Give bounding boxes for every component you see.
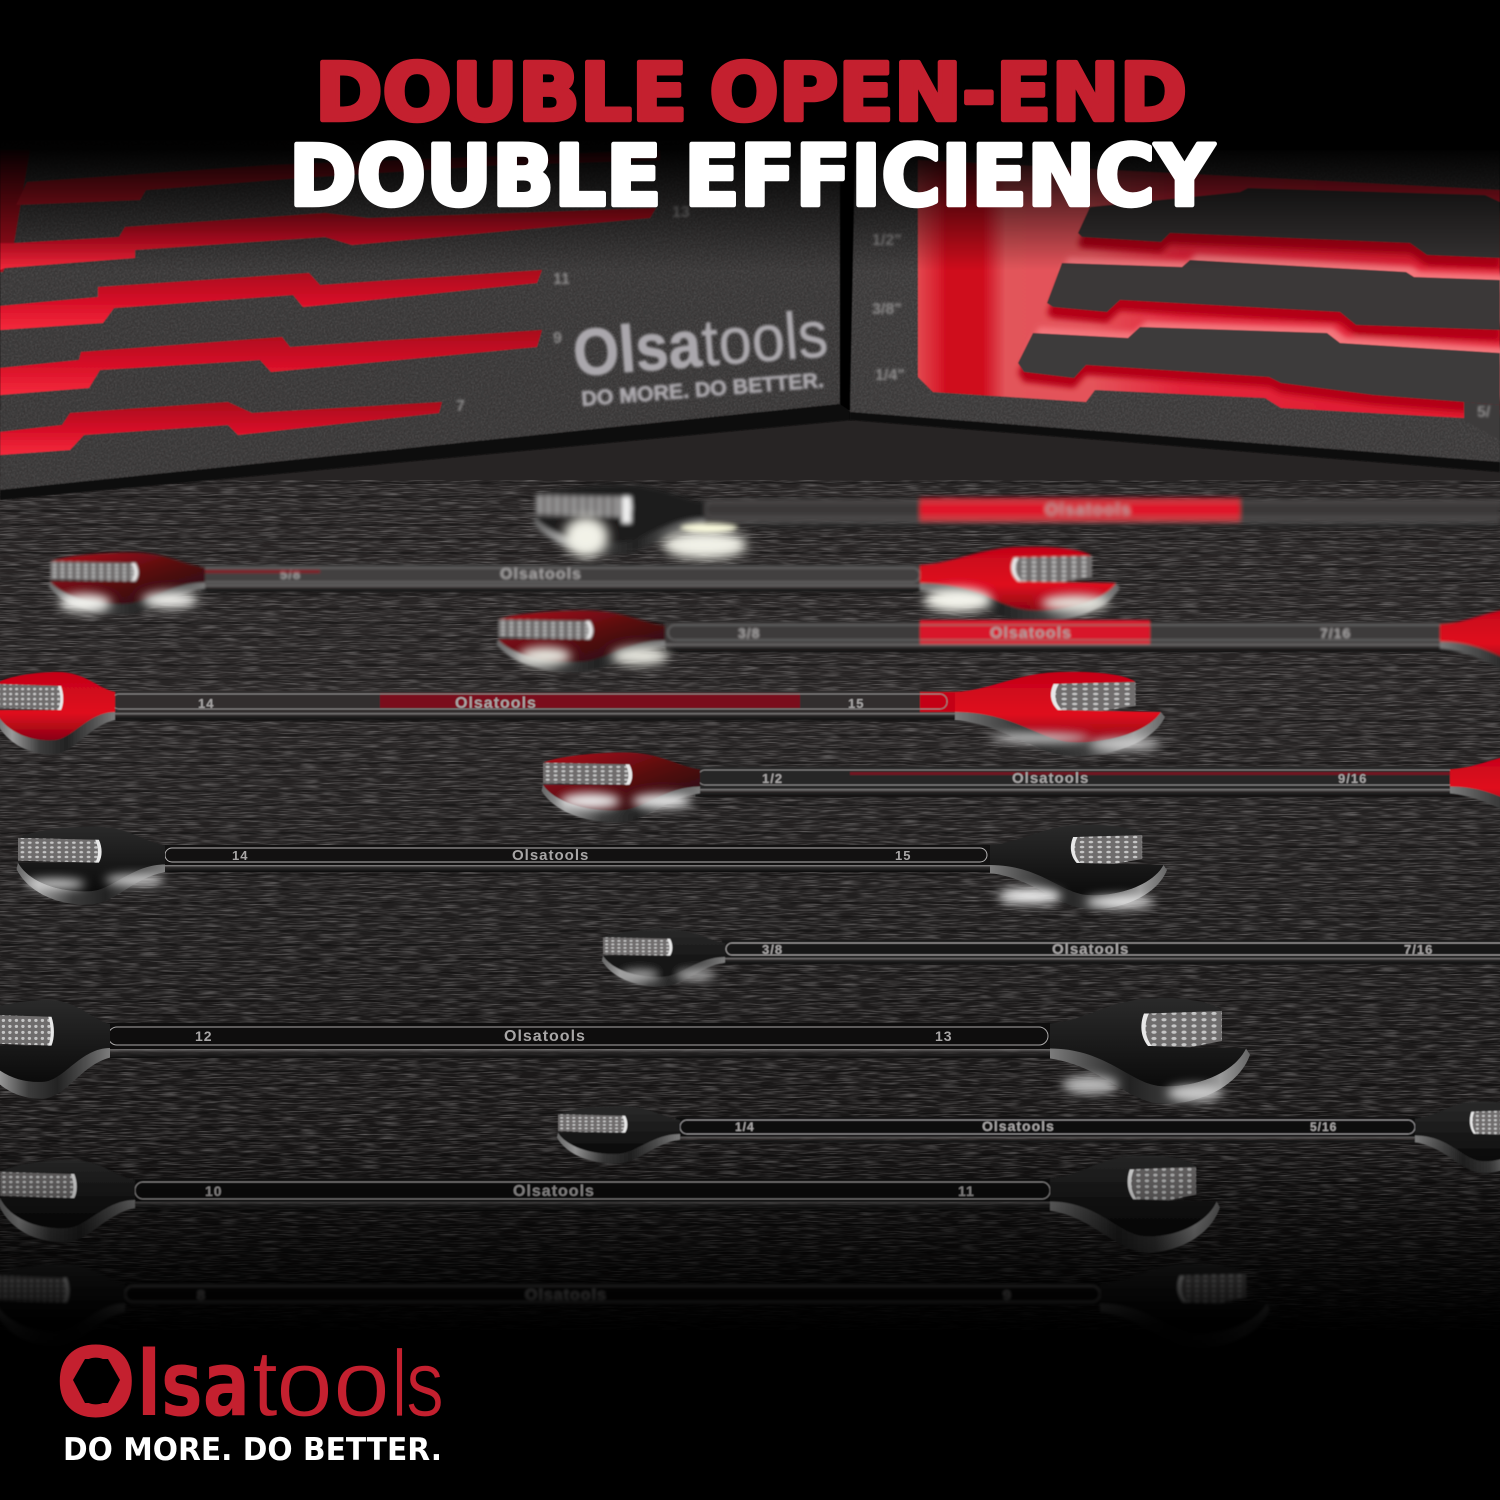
brand logo (55, 1327, 444, 1468)
wrench: fourth row: Olsatools (455, 695, 537, 712)
wrench: tenth row: 10 (205, 1183, 223, 1199)
wrench: seventh row: Olsatools (1052, 941, 1129, 958)
logo tagline: DO MORE. DO BETTER. (63, 1432, 442, 1468)
tray size labels: 1/4" (875, 367, 905, 384)
wrench: tenth row (0, 1155, 1220, 1252)
wrench: eleventh row: 8 (197, 1287, 206, 1303)
wrench: fifth row: 9/16 (1338, 771, 1367, 786)
logo wordmark: O (55, 1327, 137, 1439)
wrench: sixth row: 15 (895, 848, 911, 863)
wrench: seventh row: 3/8 (762, 942, 783, 957)
title (289, 47, 1215, 225)
tray size labels (456, 204, 1491, 421)
wrench: fifth row: Olsatools (1012, 770, 1089, 787)
tray logo: Olsatools: Olsa (570, 306, 705, 390)
tray size labels: 11 (553, 271, 570, 288)
tray logo: Olsatools: DO MORE. DO BETTER. (581, 369, 825, 411)
wrench: third row: Olsatools (990, 625, 1072, 642)
foam mat (0, 410, 1500, 1360)
logo wordmark: o (333, 1331, 390, 1437)
wrench: second row: Olsatools (500, 566, 582, 583)
wrench: tenth row: 11 (958, 1183, 975, 1199)
tray size labels: 1/2" (872, 232, 902, 249)
wrench: tenth row: Olsatools (513, 1183, 595, 1200)
wrench: fourth row (0, 672, 1165, 756)
wrench: eleventh row (0, 1264, 1270, 1348)
wrench: sixth row: Olsatools (512, 847, 589, 864)
wrench: sixth row: 14 (232, 848, 248, 863)
logo wordmark: lsa (137, 1332, 250, 1437)
wrench: fifth row (541, 752, 1500, 824)
wrench: eighth row: Olsatools (504, 1028, 586, 1045)
logo wordmark: s (406, 1331, 444, 1437)
wrench: eighth row: 12 (195, 1028, 213, 1044)
tray size labels: 5/ (1477, 404, 1491, 421)
wrench: second row: 5/8 (280, 567, 301, 582)
top shadow (0, 0, 1500, 270)
wrench: ninth row: Olsatools (982, 1118, 1055, 1134)
wrench: sixth row (17, 825, 1167, 909)
tray size labels: 9 (553, 330, 562, 347)
bottom black band (0, 1370, 1500, 1500)
tray size labels: 7 (456, 398, 465, 415)
wrench: top row back: Olsatools (1045, 500, 1131, 519)
title line 1: DOUBLE OPEN-END (315, 47, 1187, 139)
logo hexagon counter (73, 1359, 120, 1403)
wrench: eleventh row: Olsatools (525, 1287, 607, 1304)
wrench: eleventh row: 9 (1003, 1287, 1012, 1303)
tray logo: Olsatools (570, 296, 830, 411)
wrench: third row: 3/8 (738, 625, 760, 641)
wrench: ninth row: 1/4 (735, 1120, 755, 1134)
panel: right foam tray (imperial) (850, 150, 1500, 472)
logo wordmark: o (276, 1331, 333, 1437)
wrench: second row (48, 547, 1120, 623)
wrench: third row: 7/16 (1320, 625, 1351, 641)
tray size labels: 13 (672, 204, 690, 221)
wrench: seventh row: 7/16 (1404, 942, 1433, 957)
wrench: fourth row: 15 (848, 696, 864, 711)
logo wordmark: l (392, 1331, 407, 1437)
wrench: eighth row: 13 (935, 1028, 953, 1044)
wrench: seventh row (602, 929, 1500, 987)
wrench: third row (496, 607, 1500, 679)
wrench: eighth row (0, 998, 1250, 1104)
wrench: ninth row: 5/16 (1310, 1120, 1337, 1134)
title line 2: DOUBLE EFFICIENCY (289, 127, 1215, 225)
wrench: top row back (533, 484, 1500, 559)
wrench: fourth row: 14 (198, 696, 214, 711)
logo wordmark: t (252, 1331, 278, 1437)
wrench: ninth row (557, 1101, 1500, 1173)
tray size labels: 3/8" (872, 301, 902, 318)
wrench: fifth row: 1/2 (762, 771, 783, 786)
bottom shadow (0, 1140, 1500, 1370)
tray logo: Olsatools: tools (699, 296, 830, 380)
panel: left foam tray (metric) (0, 140, 852, 500)
